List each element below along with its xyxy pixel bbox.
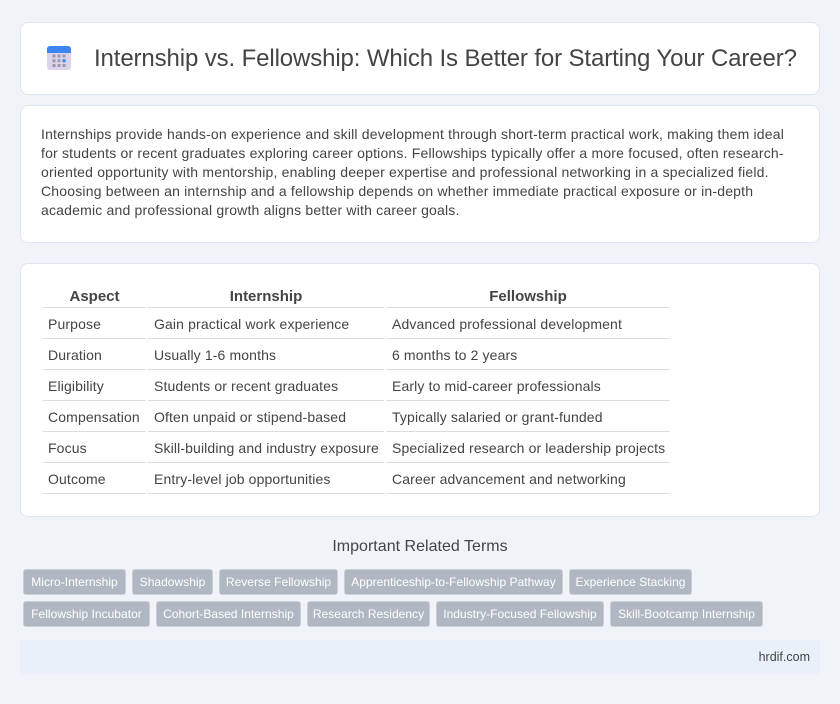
comparison table: Eligibility xyxy=(48,378,104,394)
comparison table: Gain practical work experience xyxy=(154,316,349,332)
related terms heading: Important Related Terms xyxy=(332,538,508,555)
comparison table: Focus xyxy=(48,440,87,456)
comparison table: Fellowship xyxy=(489,288,567,305)
comparison table: Specialized research or leadership projects xyxy=(392,440,665,456)
comparison table: Typically salaried or grant-funded xyxy=(392,409,603,425)
comparison table: Early to mid-career professionals xyxy=(392,378,601,394)
related terms tags: Micro-Internship xyxy=(31,575,118,589)
intro card xyxy=(20,105,820,243)
comparison table: Usually 1-6 months xyxy=(154,347,276,363)
comparison table: Internship xyxy=(230,288,302,305)
comparison table: Advanced professional development xyxy=(392,316,622,332)
comparison table: Duration xyxy=(48,347,102,363)
footer source: hrdif.com xyxy=(759,650,810,664)
related terms tags: Skill-Bootcamp Internship xyxy=(618,607,755,621)
related terms tags: Experience Stacking xyxy=(576,575,685,589)
related terms tags: Shadowship xyxy=(140,575,205,589)
comparison table: Compensation xyxy=(48,409,140,425)
comparison table: Entry-level job opportunities xyxy=(154,471,331,487)
related terms tags: Reverse Fellowship xyxy=(226,575,331,589)
comparison table xyxy=(43,288,670,494)
title: Internship vs. Fellowship: Which Is Better for Starting Your Career? xyxy=(94,45,797,72)
intro text: academic and professional growth aligns better with career goals. xyxy=(41,202,460,218)
icon: calendar xyxy=(47,46,71,70)
intro text: Choosing between an internship and a fellowship depends on whether immediate practical exposure or in-depth xyxy=(41,183,753,199)
comparison table: 6 months to 2 years xyxy=(392,347,517,363)
intro text: Internships provide hands-on experience and skill development through short-term practical work, making them ideal xyxy=(41,126,784,142)
related terms tags xyxy=(23,569,763,627)
comparison table: Career advancement and networking xyxy=(392,471,626,487)
related terms tags: Fellowship Incubator xyxy=(31,607,142,621)
table card xyxy=(20,263,820,517)
header card xyxy=(20,22,820,95)
related terms tags: Apprenticeship-to-Fellowship Pathway xyxy=(351,575,556,589)
comparison table: Skill-building and industry exposure xyxy=(154,440,379,456)
comparison table: Outcome xyxy=(48,471,106,487)
comparison table: Students or recent graduates xyxy=(154,378,338,394)
related terms tags: Industry-Focused Fellowship xyxy=(443,607,597,621)
intro text: for students or recent graduates exploring career options. Fellowships typically offer a more focused, often research- xyxy=(41,145,784,161)
comparison table: Often unpaid or stipend-based xyxy=(154,409,346,425)
intro text: oriented opportunity with mentorship, enabling deeper expertise and professional networking in a specialized field. xyxy=(41,164,769,180)
related terms tags: Cohort-Based Internship xyxy=(163,607,294,621)
comparison table: Aspect xyxy=(69,288,120,305)
intro text xyxy=(41,126,784,218)
related terms tags: Research Residency xyxy=(313,607,424,621)
comparison table: Purpose xyxy=(48,316,101,332)
footer bar xyxy=(20,640,820,674)
